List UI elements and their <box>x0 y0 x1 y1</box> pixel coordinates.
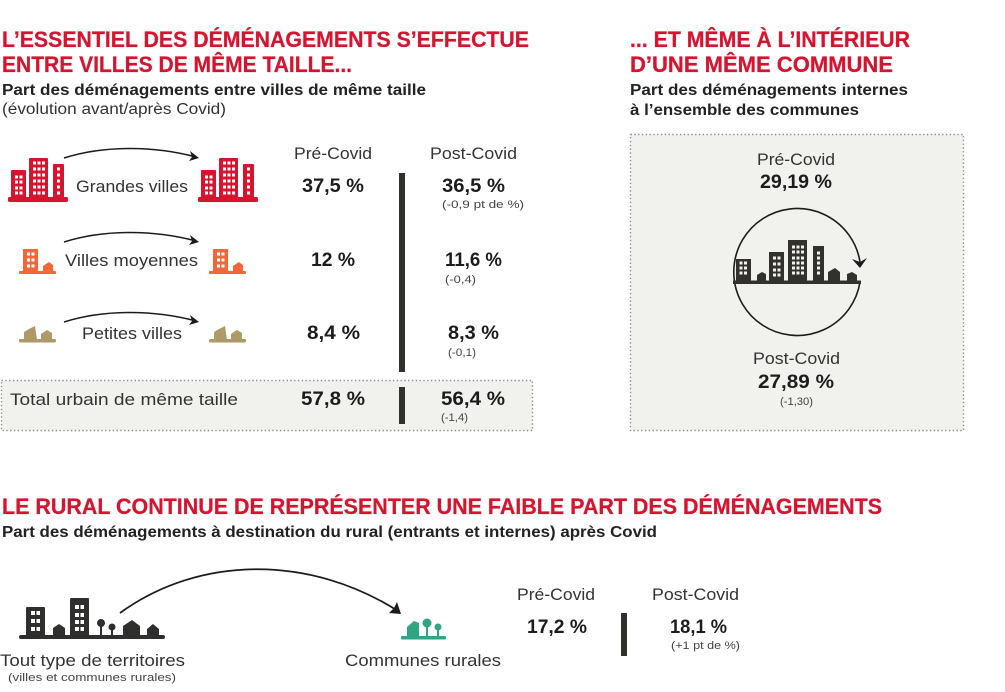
post-covid figure: (-1,30) <box>780 396 813 408</box>
rural values: 18,1 % <box>670 617 727 638</box>
heading: left section: L’ESSENTIEL DES DÉMÉNAGEMENTS S’EFFECTUE <box>2 27 529 52</box>
pre-covid figure: 29,19 % <box>760 172 832 193</box>
values: villes moyennes <box>311 250 502 286</box>
icon: all territories <box>19 598 165 639</box>
rural values: (+1 pt de %) <box>671 640 740 652</box>
label: villes moyennes: Villes moyennes <box>65 252 198 270</box>
arrow: medium city <box>64 232 199 245</box>
icon: medium city destination <box>209 249 246 274</box>
rural column headers <box>517 586 739 604</box>
icon: city in circular arrow <box>733 209 867 335</box>
values: total: 57,8 % <box>301 389 365 410</box>
values: grandes villes: (-0,9 pt de %) <box>442 199 524 211</box>
arrow: small town <box>64 312 199 325</box>
column headers <box>294 145 517 163</box>
total divider <box>399 387 405 424</box>
icon: rural communes <box>401 618 446 640</box>
icon: small town origin <box>19 326 56 342</box>
pre-covid figure <box>757 151 835 193</box>
row: grandes villes <box>8 148 524 211</box>
rural divider <box>621 613 627 656</box>
values: total: 56,4 % <box>441 389 505 410</box>
row: petites villes <box>19 312 499 359</box>
post-covid figure: 27,89 % <box>758 372 834 393</box>
column headers: Pré-Covid <box>294 145 372 163</box>
subheading: left section <box>2 82 426 118</box>
heading: left section: ENTRE VILLES DE MÊME TAILLE... <box>2 52 352 77</box>
pre-covid figure: Pré-Covid <box>757 151 835 169</box>
label: rural communes: Communes rurales <box>345 652 501 670</box>
label: all territories: Tout type de territoires <box>0 652 185 670</box>
label: petites villes: Petites villes <box>82 325 182 343</box>
icon: big city origin <box>8 158 68 202</box>
icon: small town destination <box>209 326 246 342</box>
values: total: (-1,4) <box>441 412 468 424</box>
values: grandes villes: 36,5 % <box>442 176 505 197</box>
rural values: 17,2 % <box>527 617 587 638</box>
values: petites villes: 8,3 % <box>448 323 499 344</box>
heading: right section <box>630 27 910 77</box>
values: total <box>301 389 505 424</box>
post-covid figure <box>753 350 840 408</box>
arrow: to rural communes <box>120 569 401 614</box>
label: all territories: (villes et communes rurales) <box>8 672 176 684</box>
arrow: big city <box>64 148 199 161</box>
subheading: right section: Part des déménagements internes <box>630 82 908 99</box>
label: all territories <box>0 652 185 684</box>
rural column headers: Post-Covid <box>652 586 739 604</box>
values: villes moyennes: 12 % <box>311 250 355 271</box>
values: villes moyennes: 11,6 % <box>445 250 502 271</box>
values: grandes villes <box>302 176 524 211</box>
values: petites villes: 8,4 % <box>307 323 360 344</box>
heading: right section: ... ET MÊME À L’INTÉRIEUR <box>630 27 910 52</box>
values: grandes villes: 37,5 % <box>302 176 364 197</box>
heading: left section <box>2 27 529 77</box>
subheading: right section: à l’ensemble des communes <box>630 102 859 119</box>
heading: rural section: LE RURAL CONTINUE DE REPRÉSENTER UNE FAIBLE PART DES DÉMÉNAGEMENTS <box>2 494 882 519</box>
post-covid figure: Post-Covid <box>753 350 840 368</box>
subheading: left section: (évolution avant/après Covid) <box>2 101 226 118</box>
subheading: right section <box>630 82 908 119</box>
panel: same commune <box>630 134 964 430</box>
rural column headers: Pré-Covid <box>517 586 595 604</box>
column divider <box>399 173 405 372</box>
subheading: left section: Part des déménagements entre villes de même taille <box>2 82 426 99</box>
rural values <box>527 617 740 652</box>
values: petites villes: (-0,1) <box>448 347 476 359</box>
values: petites villes <box>307 323 499 359</box>
subheading: rural section: Part des déménagements à destination du rural (entrants et internes) après Covid <box>2 524 657 541</box>
icon: medium city origin <box>19 249 56 274</box>
label: total: Total urbain de même taille <box>10 391 238 409</box>
panel: total urbain <box>2 380 532 430</box>
icon: big city destination <box>198 158 258 202</box>
row: villes moyennes <box>19 232 502 286</box>
column headers: Post-Covid <box>430 145 517 163</box>
label: grandes villes: Grandes villes <box>76 178 188 196</box>
heading: right section: D’UNE MÊME COMMUNE <box>630 52 893 77</box>
values: villes moyennes: (-0,4) <box>445 274 476 286</box>
